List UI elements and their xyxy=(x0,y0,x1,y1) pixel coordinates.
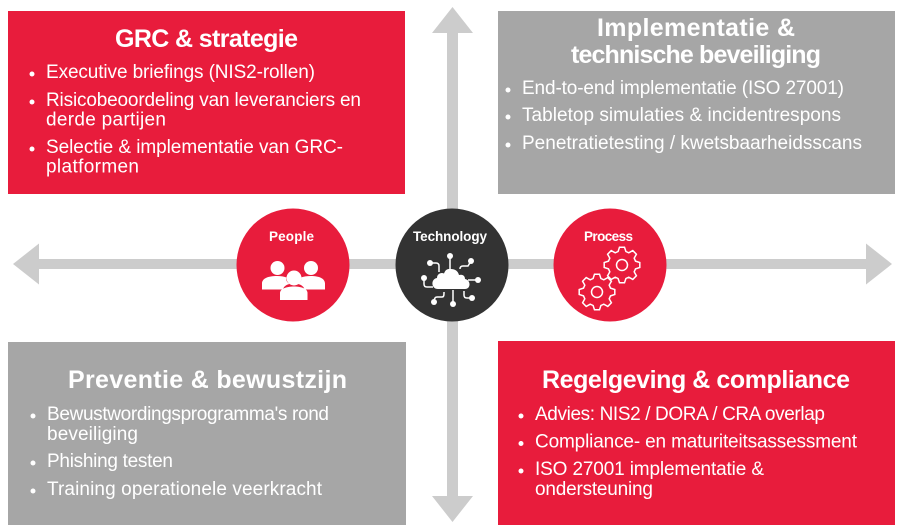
list: GRC services: Executive briefings (NIS2-rollen) xyxy=(46,62,315,83)
heading: GRC & strategie: GRC & strategie xyxy=(115,25,298,53)
icon: group of people xyxy=(262,261,325,300)
circle: Technology xyxy=(396,208,508,322)
arrow: horizontal double-headed xyxy=(13,244,892,284)
list: compliance services: ISO 27001 implementatie & xyxy=(535,459,764,480)
list: implementation services: Tabletop simulaties & incidentrespons xyxy=(522,105,841,126)
icon: lower gear xyxy=(579,274,615,310)
circle: People xyxy=(236,208,350,322)
heading: Implementatie & technische beveiliging: Implementatie & xyxy=(597,14,795,42)
list: compliance services: Advies: NIS2 / DORA / CRA overlap xyxy=(535,404,825,425)
panel: GRC & strategie xyxy=(8,11,405,194)
list: compliance services: Compliance- en maturiteitsassessment xyxy=(535,432,858,452)
list: GRC services: platformen xyxy=(46,156,139,178)
list: implementation services xyxy=(506,78,862,154)
panel: Preventie & bewustzijn xyxy=(8,342,406,525)
list: GRC services: derde partijen xyxy=(46,110,166,130)
list: implementation services: End-to-end implementatie (ISO 27001) xyxy=(522,78,844,99)
list: awareness services: Bewustwordingsprogramma's rond xyxy=(47,404,329,425)
label: Technology: Technology xyxy=(413,229,487,244)
circle: Process xyxy=(554,208,666,322)
list: compliance services xyxy=(518,404,858,500)
list: GRC services xyxy=(30,62,361,178)
heading: Preventie & bewustzijn: Preventie & bewustzijn xyxy=(68,366,347,394)
list: awareness services: Phishing testen xyxy=(47,451,173,472)
list: awareness services: Training operationele veerkracht xyxy=(47,479,323,500)
label: Process: Process xyxy=(584,229,633,244)
icon: upper gear xyxy=(604,247,640,283)
list: GRC services: Selectie & implementatie van GRC- xyxy=(46,137,343,158)
list: awareness services: beveiliging xyxy=(47,424,138,445)
list: compliance services: ondersteuning xyxy=(535,479,653,500)
arrow: vertical double-headed xyxy=(432,7,473,522)
list: implementation services: Penetratietesting / kwetsbaarheidsscans xyxy=(522,133,862,154)
list: awareness services xyxy=(30,404,329,500)
list: GRC services: Risicobeoordeling van leveranciers en xyxy=(46,90,361,111)
heading: Implementatie & technische beveiliging xyxy=(571,14,821,69)
label: People: People xyxy=(269,229,314,244)
panel: Regelgeving & compliance xyxy=(498,341,895,525)
heading: Implementatie & technische beveiliging: technische beveiliging xyxy=(571,41,821,69)
panel: Implementatie & technische beveiliging xyxy=(498,11,895,194)
heading: Regelgeving & compliance: Regelgeving & compliance xyxy=(542,366,850,394)
icon: cloud network xyxy=(421,253,481,307)
